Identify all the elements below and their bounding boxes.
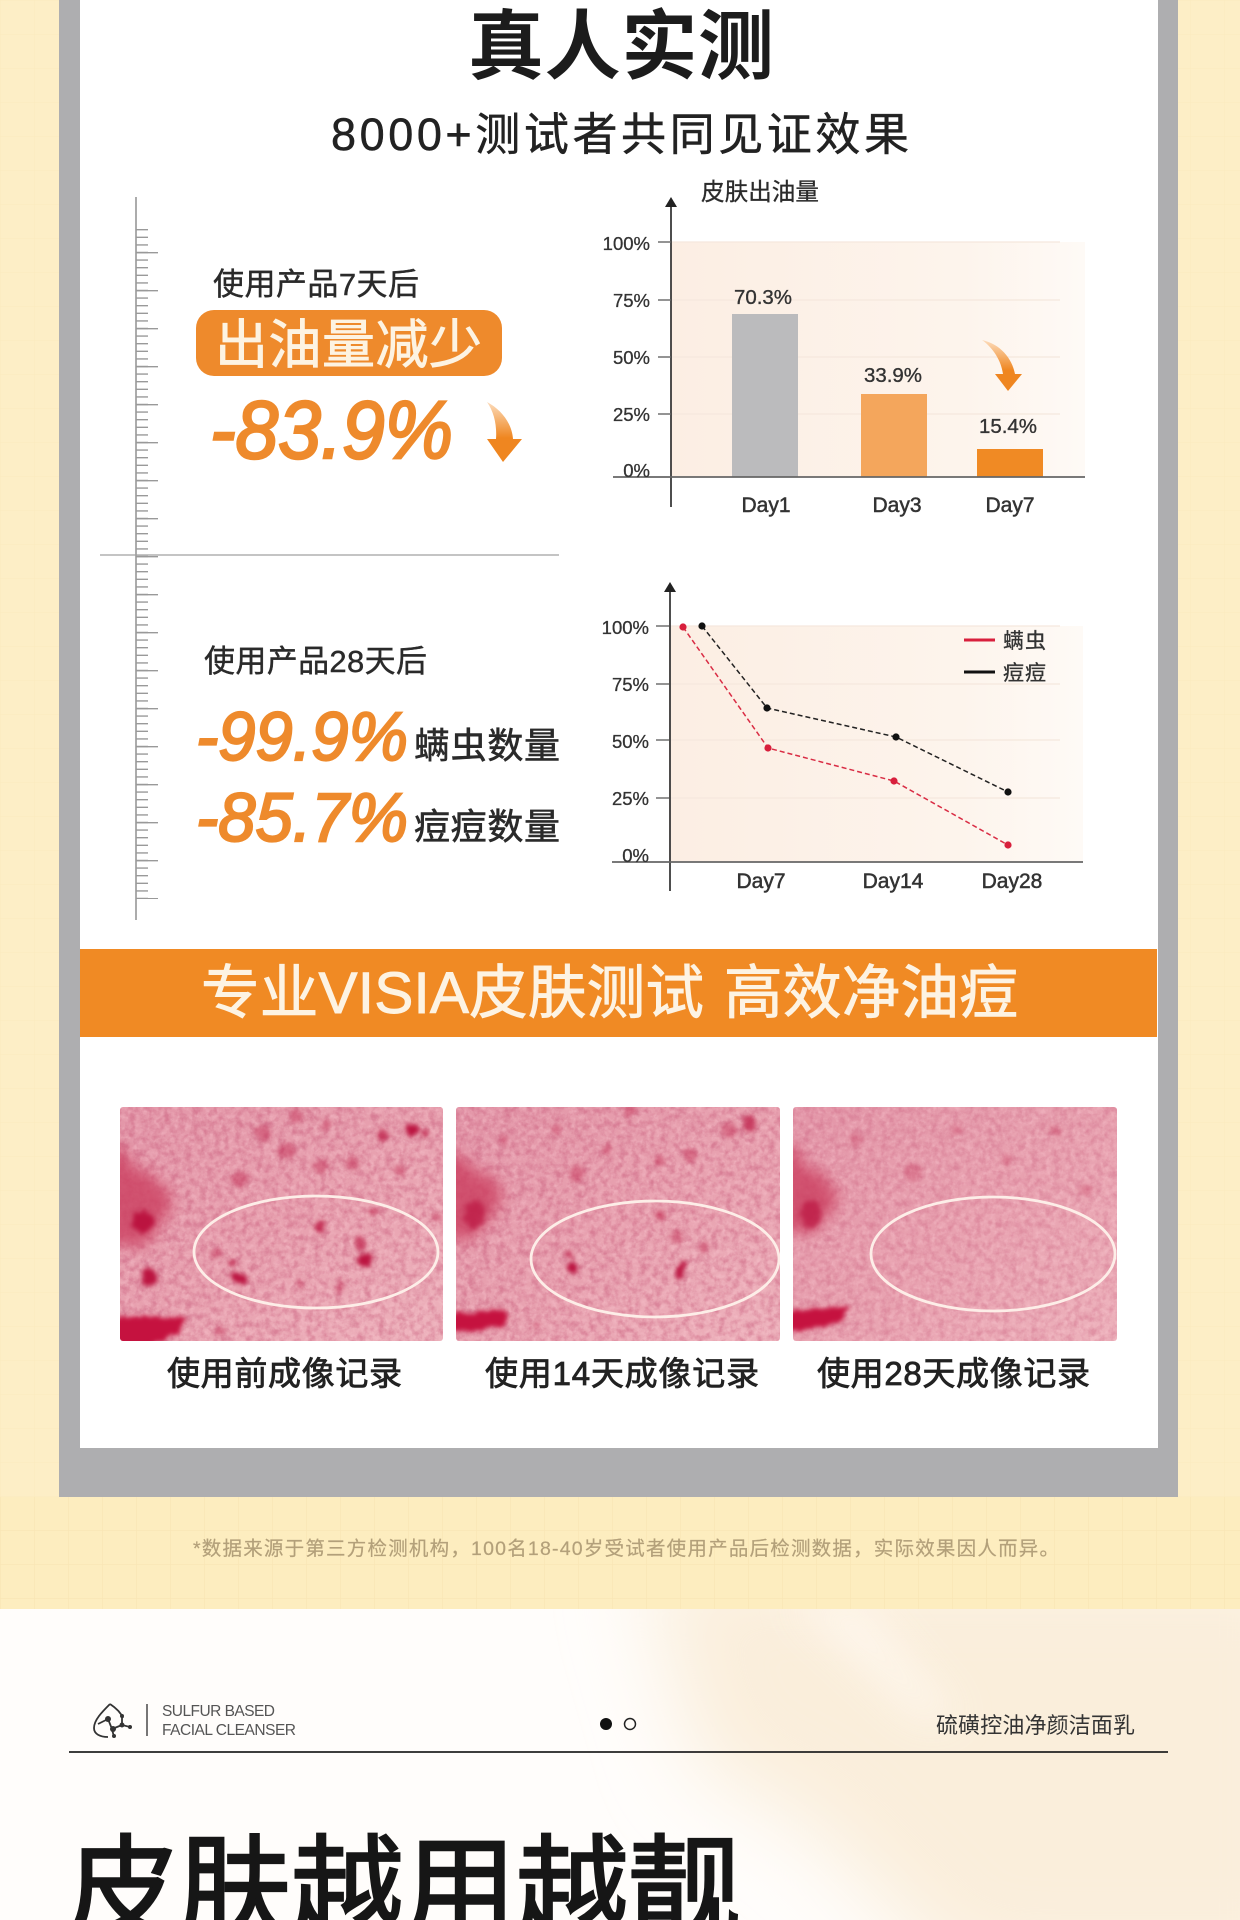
subtitle: 8000+测试者共同见证效果 <box>331 109 909 160</box>
legend: 螨虫 <box>1003 630 1046 653</box>
footnote: *数据来源于第三方检测机构，100名18-40岁受试者使用产品后检测数据，实际效果因人而异。 <box>193 1538 1059 1560</box>
y axis labels: 100% <box>603 233 650 254</box>
y axis labels: 50% <box>612 731 649 752</box>
x axis labels: Day7 <box>985 494 1035 517</box>
gray frame <box>59 0 1178 1497</box>
product name: 硫磺控油净颜洁面乳 <box>936 1713 1135 1738</box>
value labels: 70.3% <box>734 286 792 309</box>
highlight ellipse <box>871 1197 1115 1311</box>
header rule <box>69 1751 1168 1753</box>
photo: before use <box>105 1107 443 1348</box>
series: mites <box>679 623 1012 849</box>
divider <box>100 554 559 556</box>
brand name <box>162 1703 296 1739</box>
panel: 28 day result <box>196 644 560 856</box>
ruler decoration <box>136 197 147 920</box>
lower section background <box>0 1609 1240 1920</box>
stat: mites: -99.9% <box>196 698 408 775</box>
header: brand row <box>69 1703 1168 1752</box>
photo captions: 使用前成像记录 <box>167 1355 402 1392</box>
x axis labels: Day28 <box>982 870 1042 893</box>
y axis labels: 0% <box>623 460 650 481</box>
series: acne <box>698 622 1012 796</box>
brand name: FACIAL CLEANSER <box>162 1722 296 1739</box>
legend <box>964 630 1046 685</box>
x axis labels <box>741 494 1035 517</box>
y axis labels <box>603 233 650 481</box>
y axis labels: 25% <box>613 404 650 425</box>
photo captions: 使用14天成像记录 <box>485 1355 759 1392</box>
bar: Day1 <box>732 314 798 477</box>
value labels: 15.4% <box>979 415 1037 438</box>
pill: oil reduced: 出油量减少 <box>215 316 482 375</box>
banner: VISIA skin test: 专业VISIA皮肤测试 <box>201 961 704 1026</box>
bar: Day3 <box>861 394 927 477</box>
value labels: 33.9% <box>864 364 922 387</box>
panel: 7 day result <box>196 267 522 476</box>
chart title: 皮肤出油量 <box>701 179 819 206</box>
y axis labels <box>602 617 649 866</box>
title: 真人实测 <box>468 5 774 90</box>
photo captions: 使用28天成像记录 <box>817 1355 1090 1392</box>
icon: molecule logo <box>94 1704 132 1738</box>
legend: 痘痘 <box>1003 662 1046 685</box>
x axis labels: Day1 <box>741 494 791 517</box>
icon: down arrow <box>487 402 522 462</box>
bar: Day7 <box>977 449 1043 477</box>
icon: curved arrow <box>982 340 1022 391</box>
stat: acne <box>196 779 560 856</box>
x axis labels: Day14 <box>863 870 924 893</box>
x axis labels: Day7 <box>736 870 786 893</box>
stat: acne: 痘痘数量 <box>414 806 560 847</box>
stat: acne: -85.7% <box>196 779 408 856</box>
bar chart: skin oil <box>603 179 1085 517</box>
stat: mites: 螨虫数量 <box>414 725 560 766</box>
y axis labels: 100% <box>602 617 649 638</box>
highlight ellipse <box>194 1196 438 1308</box>
photo captions <box>167 1355 1090 1392</box>
y axis labels: 25% <box>612 788 649 809</box>
caption: after 7 days: 使用产品7天后 <box>213 267 419 302</box>
x axis labels <box>736 870 1042 893</box>
photo: after 14 days <box>441 1104 780 1341</box>
x axis labels: Day3 <box>872 494 922 517</box>
caption: after 28 days: 使用产品28天后 <box>204 644 427 679</box>
y axis labels: 50% <box>613 347 650 368</box>
y axis labels: 75% <box>613 290 650 311</box>
banner: VISIA skin test: 高效净油痘 <box>724 961 1018 1026</box>
stat: mites <box>196 698 560 775</box>
y axis labels: 0% <box>622 845 649 866</box>
photo: after 28 days <box>778 1107 1117 1341</box>
highlight ellipse <box>531 1201 779 1317</box>
stat: -83.9%: -83.9% <box>210 385 453 476</box>
line chart: mites and acne <box>602 582 1083 893</box>
white panel <box>80 0 1158 1448</box>
axes <box>612 582 1083 891</box>
logo divider <box>146 1704 148 1736</box>
axes <box>613 197 1085 507</box>
value labels <box>734 286 1037 438</box>
brand name: SULFUR BASED <box>162 1703 275 1720</box>
banner: VISIA skin test <box>80 949 1157 1037</box>
y axis labels: 75% <box>612 674 649 695</box>
pagination dots <box>600 1718 636 1730</box>
